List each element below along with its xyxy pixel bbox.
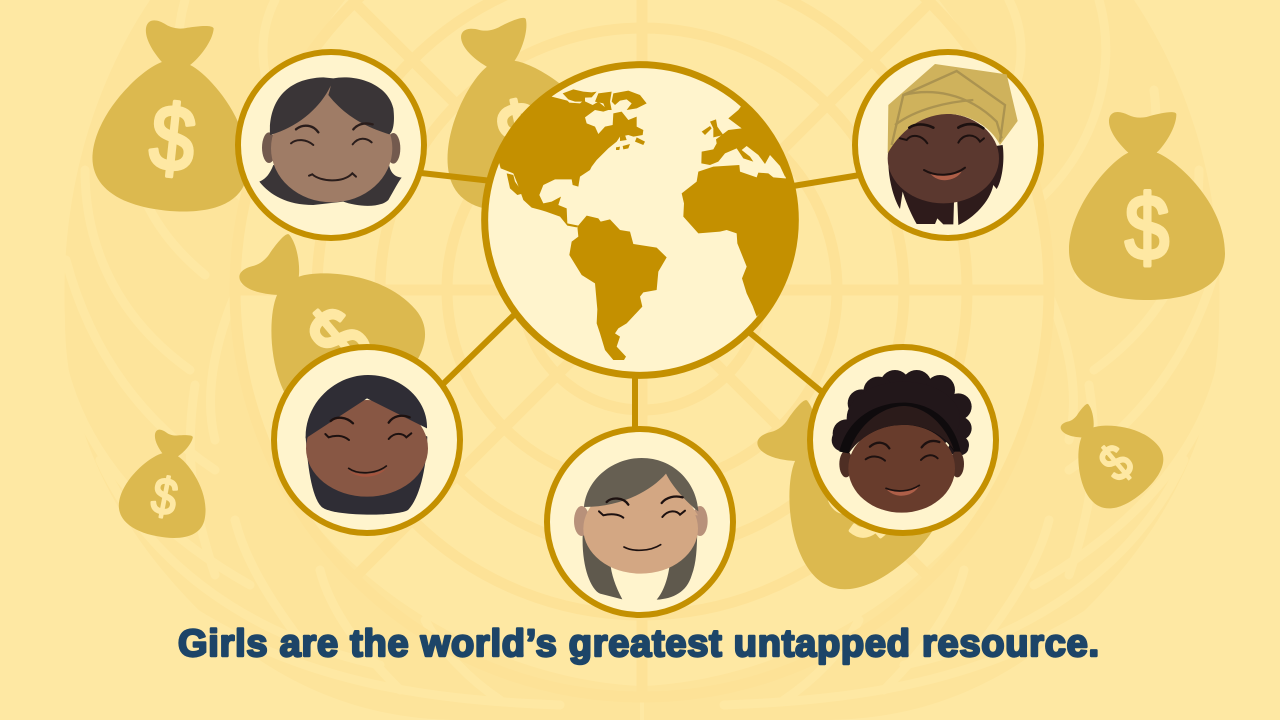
africa xyxy=(682,165,792,316)
money bag: small right xyxy=(1042,386,1175,521)
money bag: lower right: $ xyxy=(808,453,908,560)
north america xyxy=(499,96,644,228)
british isles xyxy=(702,126,712,135)
avatar: girl top right with headwrap xyxy=(855,52,1041,238)
money bag: lower right xyxy=(723,368,964,612)
money bag: left tilted: $ xyxy=(290,287,390,394)
money bag: small right: $ xyxy=(1089,434,1144,493)
avatar: girl top left xyxy=(238,52,424,238)
avatar: girl bottom center xyxy=(547,429,733,615)
money bag: left tilted xyxy=(205,202,446,446)
money bag: right large xyxy=(1069,112,1225,300)
baja california xyxy=(507,173,523,195)
money bag: top left: $ xyxy=(145,85,200,192)
south america xyxy=(569,216,667,360)
globe xyxy=(480,60,813,375)
money bag: behind globe xyxy=(420,7,612,223)
title: Girls are the world’s greatest untapped resource. xyxy=(178,623,1099,665)
connector lines xyxy=(421,173,860,430)
money bag: small left xyxy=(114,425,220,545)
money bag: behind globe: $ xyxy=(489,81,553,191)
europe xyxy=(701,106,786,177)
arctic islands xyxy=(563,89,597,102)
money bag: top left xyxy=(87,15,262,219)
money bag: right large: $ xyxy=(1125,176,1169,279)
avatar: girl right with curly hair xyxy=(810,347,996,533)
avatar: girl left with hijab xyxy=(274,347,460,533)
money bag: small left: $ xyxy=(147,467,182,528)
